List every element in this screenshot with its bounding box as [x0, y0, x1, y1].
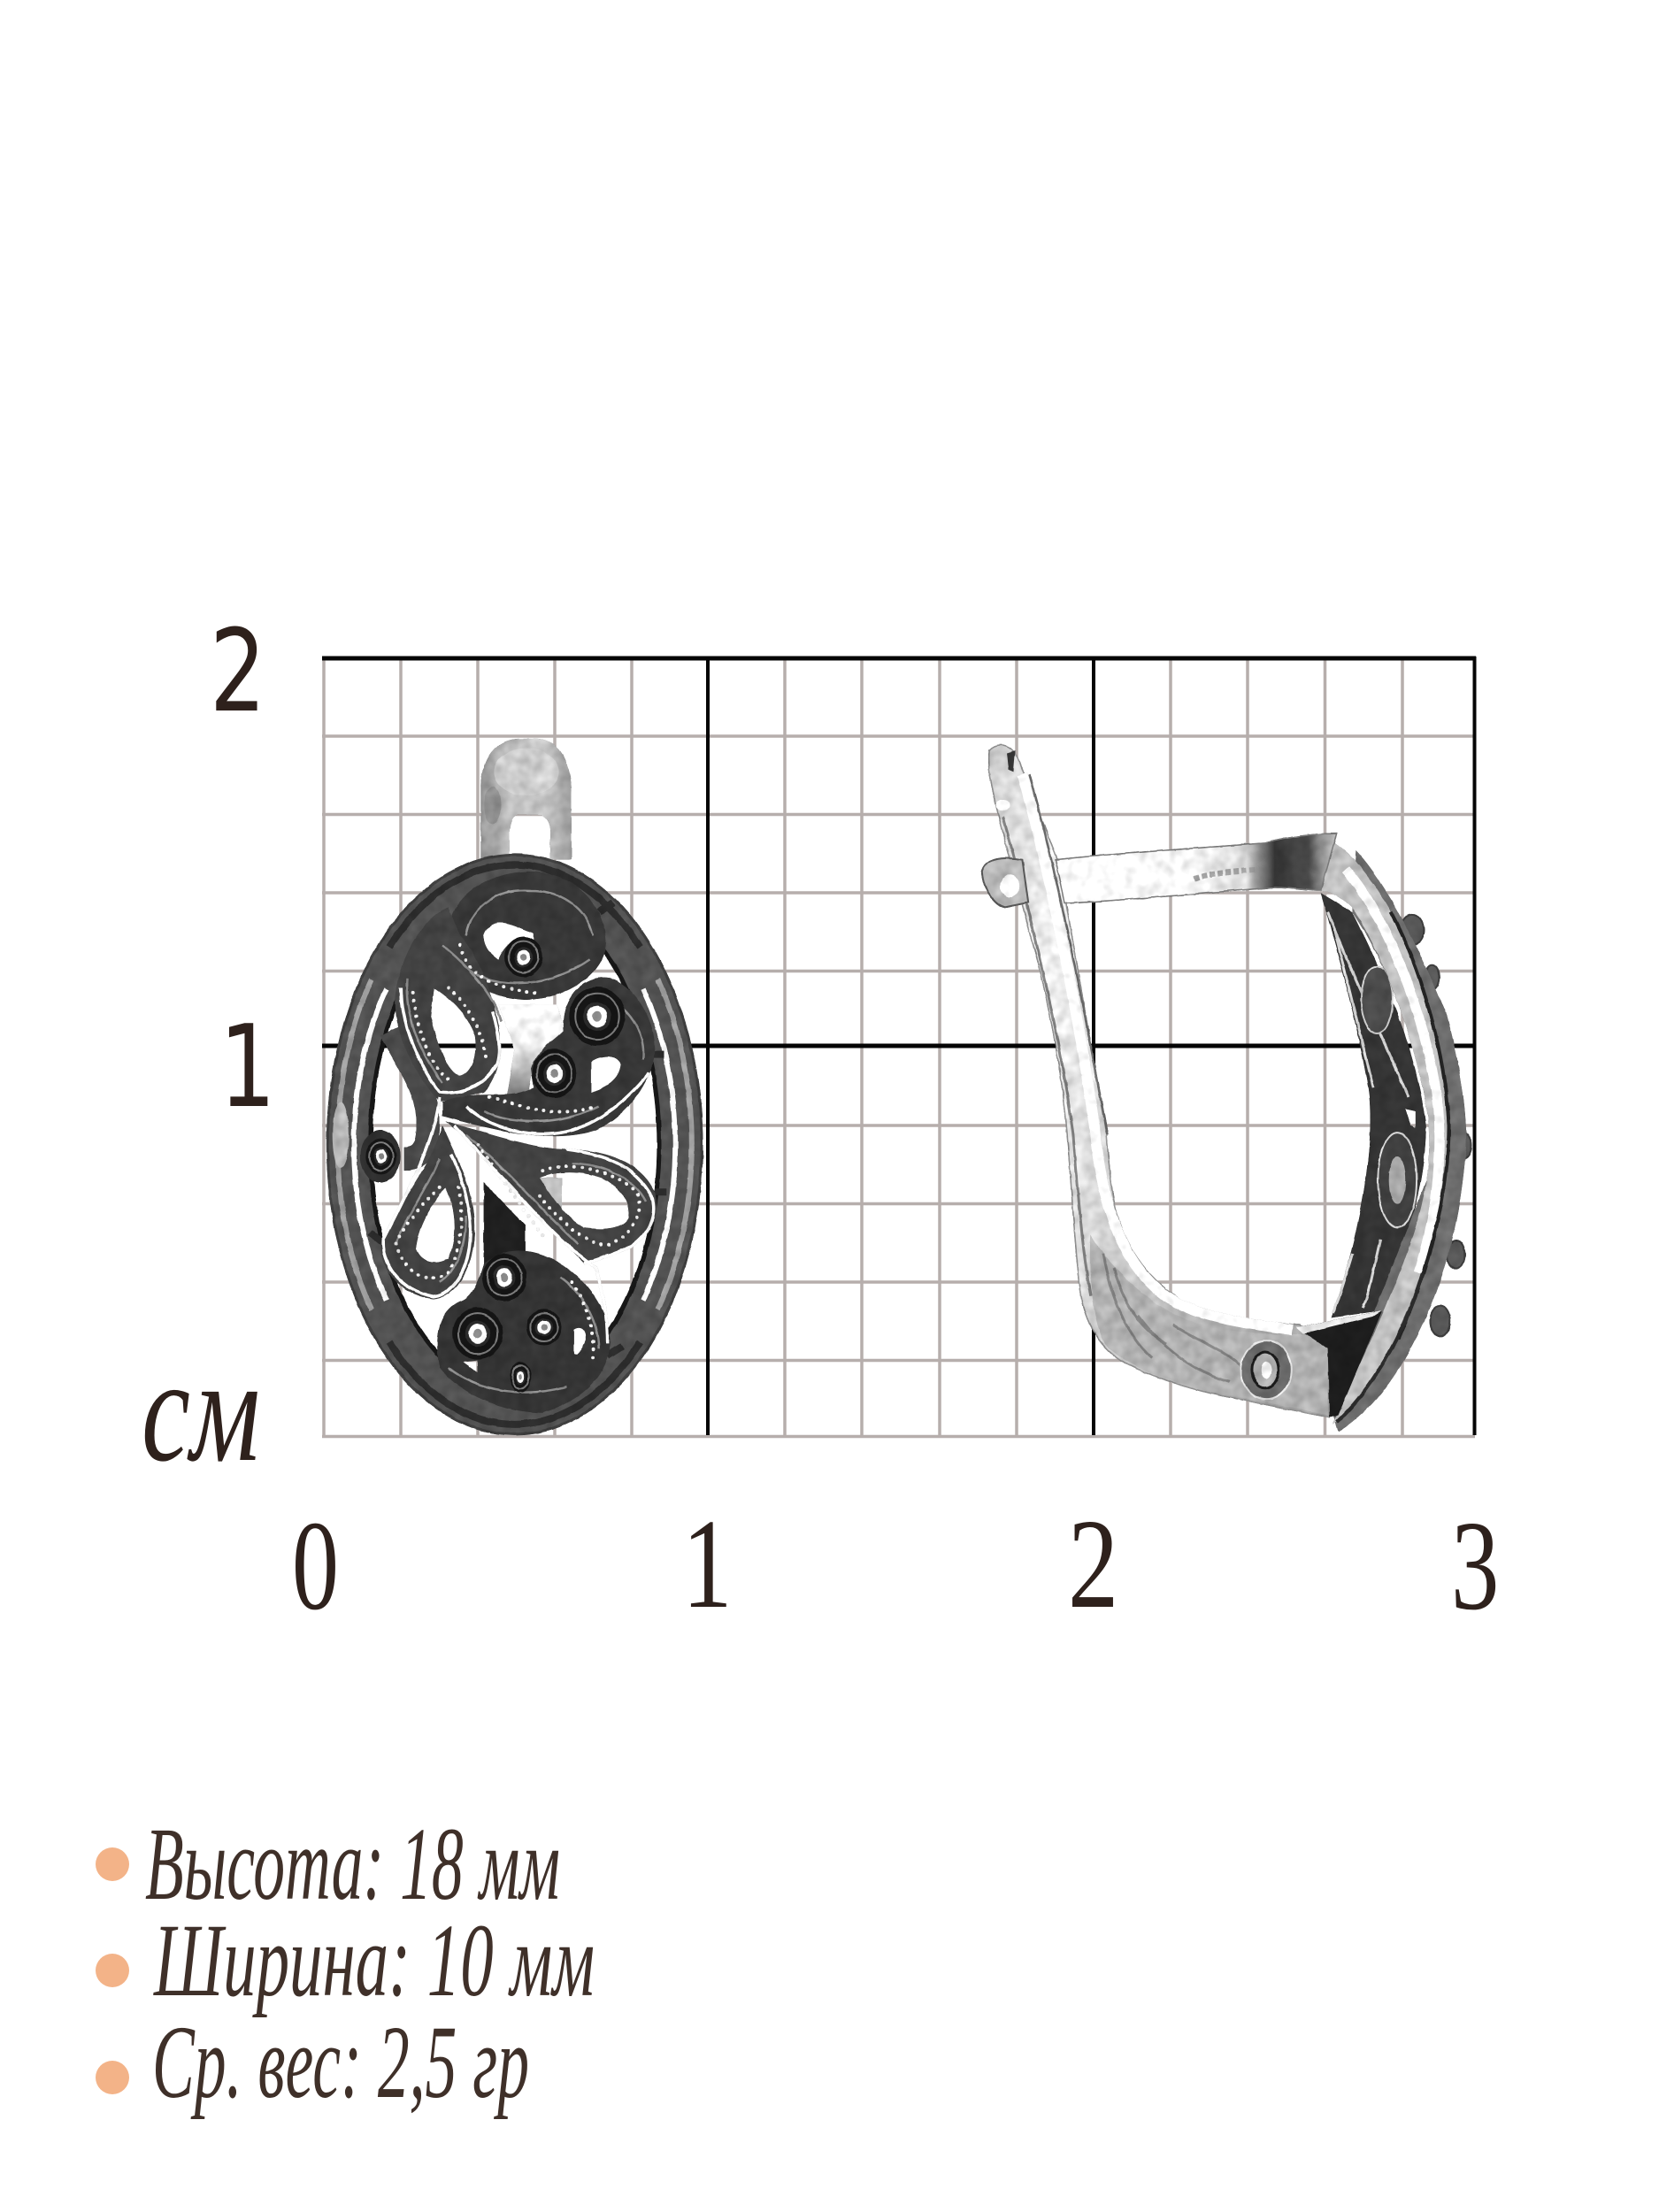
filigree highlights	[383, 988, 654, 1344]
text width: Ширина: 10 мм	[153, 1902, 595, 2018]
y axis label 1: 1	[219, 1002, 276, 1133]
leaf upper left	[396, 907, 500, 1102]
granulation dots	[396, 945, 640, 1358]
outer rim	[349, 876, 680, 1413]
x axis label 2: 2	[1068, 1494, 1118, 1635]
dark hinge wedge	[1296, 1310, 1382, 1417]
vine and small side bead	[391, 1031, 428, 1159]
x axis label 0: 0	[292, 1495, 339, 1637]
cross bar	[1056, 833, 1337, 903]
front rim	[1317, 836, 1448, 1425]
text height: Высота: 18 мм	[145, 1806, 560, 1922]
y axis label 2: 2	[210, 606, 266, 738]
hoop arm	[988, 745, 1330, 1417]
rim side beads	[1401, 915, 1471, 1336]
measurement grid	[322, 657, 1476, 1437]
back plate seen through openings	[498, 1004, 565, 1094]
textured lower arm	[1090, 1235, 1328, 1415]
bullet width	[96, 1954, 129, 1987]
hook loop	[480, 739, 572, 860]
text weight: Ср. вес: 2,5 гр	[152, 2004, 529, 2120]
lobe upper right	[442, 978, 655, 1136]
filigree texture	[396, 890, 646, 1393]
x axis label 1: 1	[682, 1494, 733, 1635]
hinge rivet	[1241, 1340, 1292, 1400]
inner ring connectors	[370, 902, 666, 1356]
x axis label 3: 3	[1451, 1494, 1499, 1637]
leaf lower right	[445, 1121, 657, 1263]
back filigree	[1321, 893, 1426, 1317]
leaf lower left	[380, 1125, 475, 1299]
earring front view	[327, 739, 702, 1434]
ear pin stub	[982, 858, 1028, 907]
specifications list	[96, 1806, 595, 2120]
bullet weight	[96, 2061, 129, 2094]
earring side view	[982, 745, 1471, 1432]
bottom cluster	[437, 1251, 611, 1413]
bullet height	[96, 1847, 129, 1881]
outer rim band	[1333, 850, 1466, 1432]
scroll top	[449, 872, 606, 1000]
beads	[365, 937, 626, 1393]
unit label cm: см	[142, 1328, 260, 1493]
